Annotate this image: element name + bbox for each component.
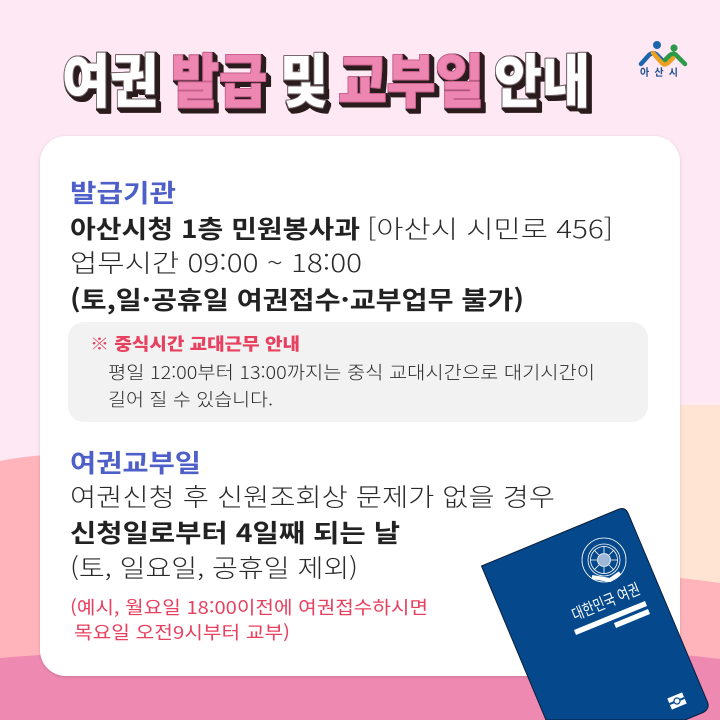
- passport emblem: [582, 538, 626, 582]
- example line 1: (예시, 월요일 18:00이전에 여권접수하시면: [70, 594, 428, 620]
- callout line 1: 평일 12:00부터 13:00까지는 중식 교대시간으로 대기시간이: [108, 359, 595, 385]
- title: 및: [280, 50, 328, 115]
- title: [62, 50, 590, 115]
- background wave: light pink: [0, 454, 720, 720]
- title: 여권: [62, 50, 158, 115]
- background wave: peach: [400, 405, 720, 620]
- closed days: (토,일·공휴일 여권접수·교부업무 불가): [70, 281, 524, 317]
- office name and address: [아산시 시민로 456]: [367, 210, 613, 246]
- office hours: 업무시간 09:00 ~ 18:00: [70, 244, 362, 280]
- icon: passport: [482, 509, 708, 720]
- passport chip symbol: [667, 692, 687, 710]
- title: 안내: [494, 50, 590, 115]
- panel: main info card: [40, 136, 680, 676]
- background wave: deep pink: [0, 650, 720, 720]
- callout heading: ※ 중식시간 교대근무 안내: [90, 330, 300, 355]
- passport white bars: [574, 601, 650, 635]
- example line 2: 목요일 오전9시부터 교부): [74, 619, 290, 645]
- delivery condition: 여권신청 후 신원조회상 문제가 없을 경우: [70, 478, 555, 514]
- title: 교부일: [338, 50, 484, 115]
- heading: passport delivery date: 여권교부일: [70, 444, 201, 480]
- callout line 2: 길어 질 수 있습니다.: [108, 386, 273, 412]
- logo: Asan city: 아산시: [640, 64, 678, 79]
- title: 발급: [171, 50, 267, 115]
- excluded days: (토, 일요일, 공휴일 제외): [70, 549, 358, 585]
- passport title: 대한민국 여권: [567, 576, 643, 625]
- delivery day: 신청일로부터 4일째 되는 날: [70, 514, 400, 550]
- office name and address: 아산시청 1층 민원봉사과: [70, 210, 360, 246]
- logo: Asan city: [640, 41, 685, 79]
- heading: issuing office: 발급기관: [70, 174, 176, 210]
- callout: lunch shift notice: [68, 322, 648, 422]
